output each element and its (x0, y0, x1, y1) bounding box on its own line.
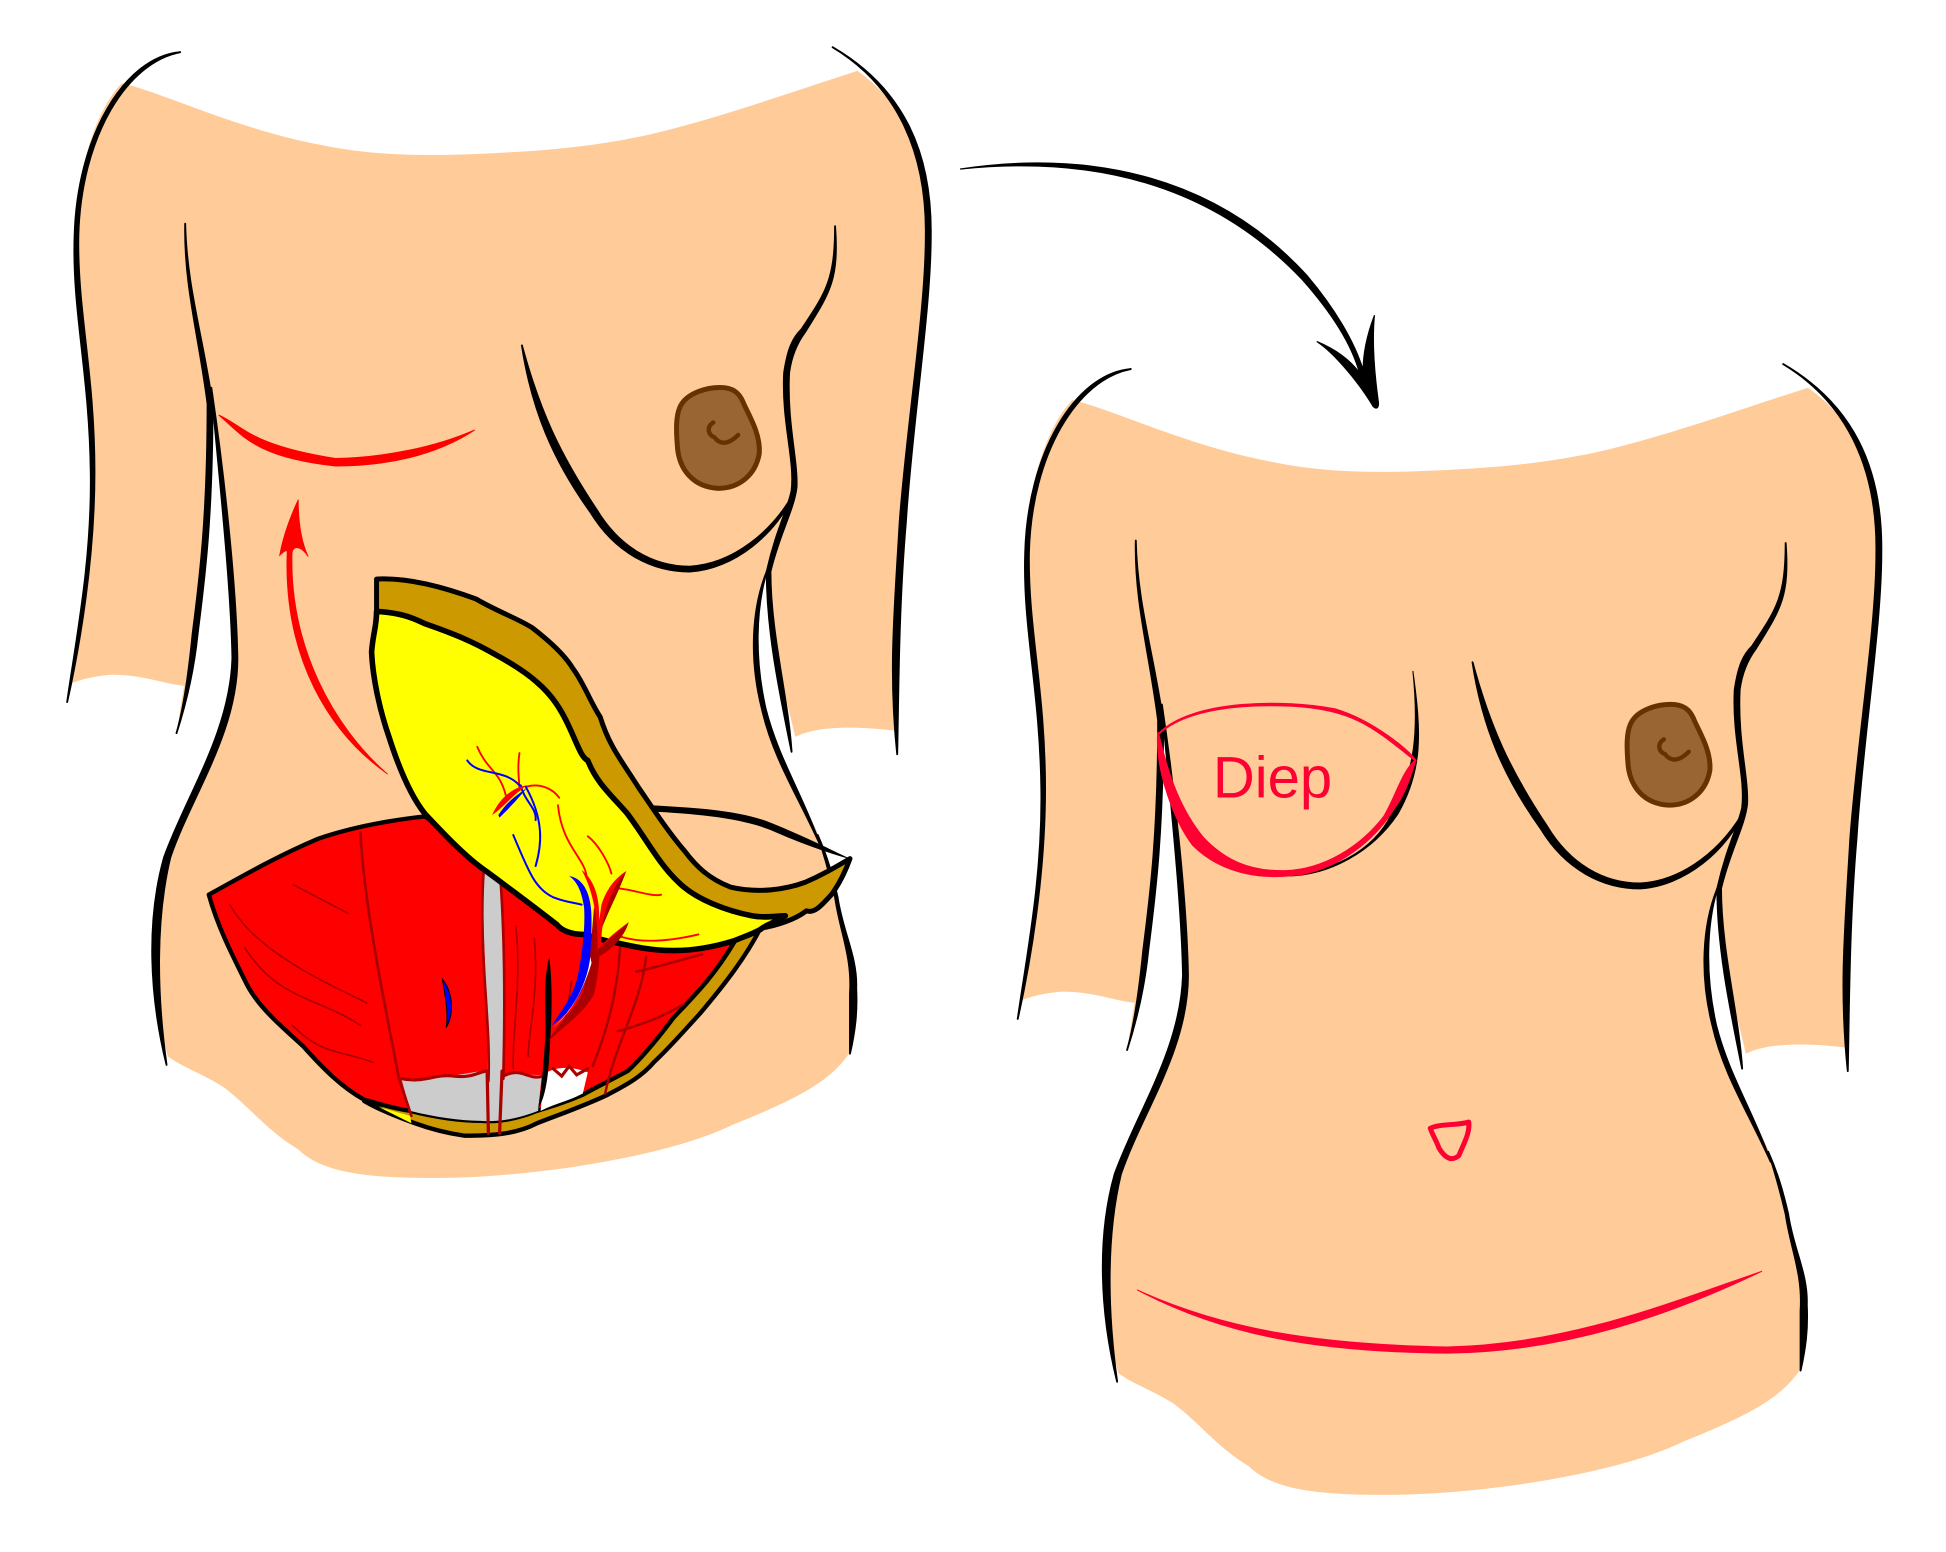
exposed white area (541, 1068, 588, 1111)
pedicle: deep inferior epigastric vessels (548, 870, 629, 1041)
right torso: skin (1021, 388, 1879, 1495)
black vertical edge of the dissection (538, 957, 552, 1108)
flap fat layer, yellow (372, 611, 785, 951)
skin fold line under the lifted abdominal flap (650, 805, 852, 860)
right torso: areola (1627, 704, 1710, 805)
flap vessels, blue (467, 760, 582, 905)
dark red muscle fibres (230, 833, 702, 1133)
left torso: red mastectomy scar (219, 415, 475, 466)
right torso: Diep flap outline (1158, 704, 1415, 876)
abdominal flap dissection (209, 579, 850, 1136)
flap skin paddle, brown band (377, 579, 850, 938)
left torso: skin (71, 71, 928, 1178)
red arrow: flap moved upward to chest (280, 500, 388, 774)
left torso: areola (677, 388, 759, 488)
right torso: body outlines (1018, 364, 1881, 1382)
rectus muscle field (209, 816, 734, 1121)
red branch with blue vein at the upper vessel hub (492, 785, 527, 818)
linea alba and posterior sheath, grey (401, 871, 542, 1121)
lower skin edge of the opened abdomen (364, 928, 761, 1136)
left torso: body outlines (67, 47, 931, 1065)
right torso: abdominal donor-site scar (1137, 1271, 1762, 1353)
flap vessels, red (477, 747, 698, 941)
right torso: navel scar (1430, 1122, 1469, 1159)
right torso: reconstructed breast outline (1286, 671, 1419, 876)
label: Diep: Diep (1213, 746, 1332, 811)
curved black arrow from left figure to right figure (961, 163, 1378, 408)
small yellow wedge (379, 1107, 411, 1123)
small perforator vessel, blue (442, 979, 451, 1028)
